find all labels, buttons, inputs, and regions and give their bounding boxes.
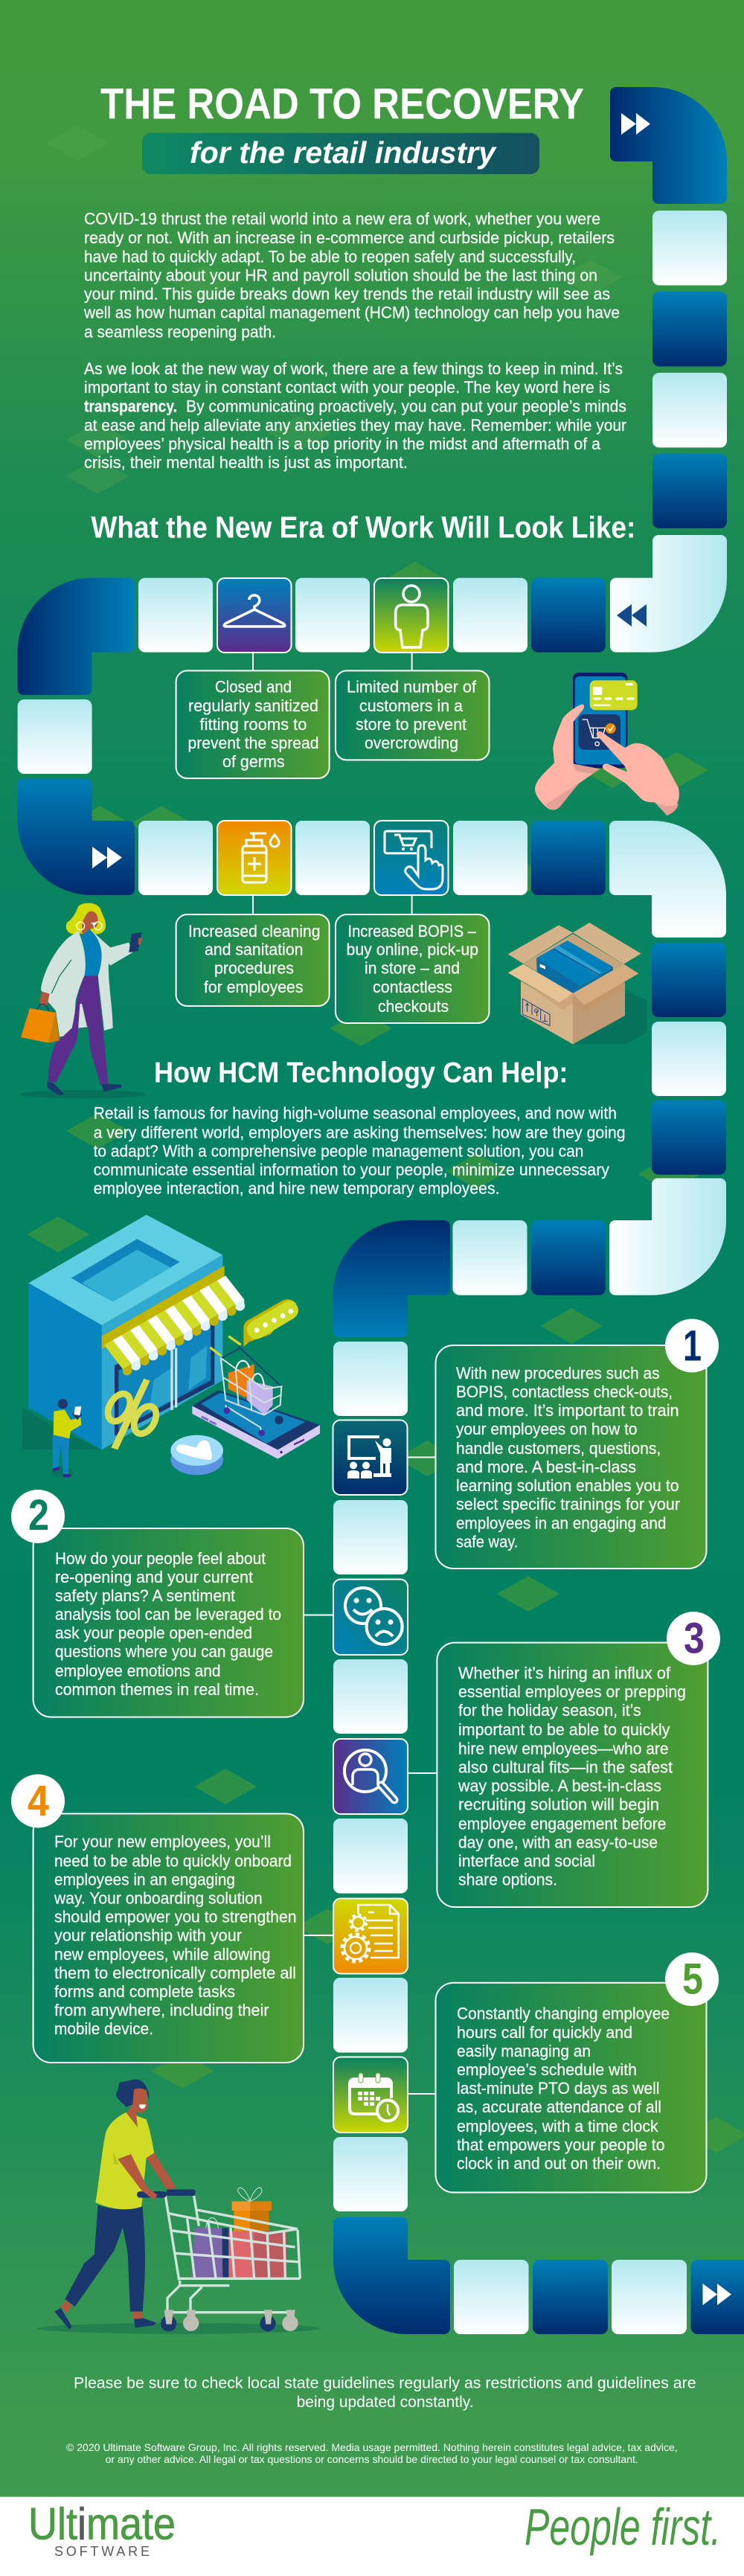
- badge 3: [667, 1612, 720, 1665]
- legal disclaimer: [66, 2441, 678, 2465]
- badge 5: [665, 1952, 719, 2006]
- callout: cleaning procedures: procedures: [214, 959, 294, 978]
- callout: fitting rooms: fitting rooms to: [199, 715, 307, 734]
- callout 3: recruiting: day one, with an easy-to-use: [458, 1833, 658, 1851]
- illustration: open cardboard box: [508, 923, 647, 1044]
- heading: how HCM can help: How HCM Technology Can Help:: [154, 1057, 568, 1089]
- callout 4: onboarding: mobile device.: [54, 2019, 153, 2038]
- callout 5: time clock: easily managing an: [457, 2042, 591, 2060]
- callout 4: onboarding: way. Your onboarding solution: [54, 1888, 263, 1908]
- intro paragraph 2: crisis, their mental health is just as important.: [84, 453, 408, 472]
- callout 3: recruiting: also cultural fits—in the safest: [458, 1758, 673, 1777]
- HCM paragraph: communicate essential information to your people, minimize unnecessary: [94, 1161, 610, 1179]
- badge 2: 2: [28, 1491, 49, 1539]
- callout 5: time clock: Constantly changing employee: [457, 2004, 670, 2022]
- logo: Ultimate Software: Ultimate: [28, 2499, 176, 2549]
- icon tile: recruiting search: [333, 1739, 408, 1814]
- icon tile: sanitizer bottle: [217, 821, 292, 895]
- callout 1: training: [408, 1319, 719, 1569]
- callout 3: recruiting: share options.: [458, 1871, 557, 1888]
- callout 5: time clock: employees, with a time clock: [457, 2117, 659, 2136]
- callout 2: sentiment analysis: common themes in real time.: [55, 1680, 259, 1699]
- callout 3: recruiting: hire new employees—who are: [458, 1740, 669, 1758]
- icon tile: hanger: [217, 578, 292, 653]
- callout 3: recruiting: for the holiday season, it’s: [458, 1701, 641, 1720]
- callout 4: onboarding: new employees, while allowing: [54, 1945, 271, 1964]
- callout: fitting rooms: [176, 653, 330, 778]
- callout: cleaning procedures: [176, 895, 330, 1006]
- badge 2: [11, 1490, 65, 1543]
- intro paragraph 1: COVID-19 thrust the retail world into a new era of work, whether you were: [84, 209, 600, 228]
- callout 2: sentiment analysis: questions where you can gauge: [55, 1642, 273, 1661]
- callout 5: time clock: that empowers your people to: [457, 2136, 665, 2154]
- icon tile: calendar and clock: [333, 2057, 408, 2133]
- legal disclaimer: or any other advice. All legal or tax questions or concerns should be directed to your legal counsel or tax consultant.: [106, 2453, 638, 2465]
- callout 2: sentiment analysis: How do your people feel about: [55, 1549, 266, 1568]
- heading: new era of work: What the New Era of Work Will Look Like:: [91, 510, 635, 545]
- background diamonds: upper, faint: [46, 125, 622, 494]
- road: left elbow top: [18, 578, 135, 695]
- callout: limited customers: customers in a: [359, 696, 464, 715]
- callout: BOPIS: checkouts: [378, 997, 449, 1016]
- footer band: [0, 2497, 744, 2576]
- badge 1: 1: [683, 1322, 702, 1371]
- intro paragraph 2: at ease and help alleviate any anxieties they may have. Remember: while your: [84, 416, 626, 435]
- callout 3: recruiting: employee engagement before: [458, 1814, 666, 1833]
- badge 4: [11, 1774, 65, 1827]
- callout 4: onboarding: [11, 1774, 333, 2063]
- road: left elbow bottom with arrow: [18, 778, 135, 895]
- icon tile: cart touch screen: [374, 821, 448, 895]
- subtitle banner: [142, 133, 539, 174]
- callout 5: time clock: hours call for quickly and: [457, 2023, 632, 2042]
- icon tile: onboarding gears and document: [333, 1899, 408, 1973]
- callout 1: training: employees in an engaging and: [456, 1513, 666, 1533]
- callout 4: onboarding: from anywhere, including their: [54, 2001, 269, 2019]
- title: THE ROAD TO RECOVERY: [100, 80, 584, 128]
- callout 3: recruiting: Whether it’s hiring an influx of: [458, 1664, 671, 1682]
- callout 5: time clock: clock in and out on their own.: [457, 2154, 661, 2173]
- intro paragraph 1: ready or not. With an increase in e-commerce and curbside pickup, retailers: [84, 228, 615, 247]
- callout 4: onboarding: your relationship with your: [54, 1926, 242, 1945]
- intro paragraph 2: transparency.: [84, 397, 177, 416]
- icon tile: training: [333, 1420, 408, 1495]
- road: third row tiles: [452, 1220, 606, 1295]
- road: second row tiles: [138, 821, 606, 895]
- callout: limited customers: store to prevent: [356, 715, 466, 734]
- callout: fitting rooms: regularly sanitized: [188, 696, 318, 715]
- road: top elbow with start arrow: [610, 87, 727, 204]
- badge 5: 5: [682, 1955, 703, 2003]
- callout 5: time clock: as, accurate attendance of all: [457, 2098, 661, 2116]
- callout 3: recruiting: way possible. A best-in-class: [458, 1777, 661, 1795]
- callout: BOPIS: Increased BOPIS –: [348, 922, 477, 941]
- illustration: man pushing shopping cart: [37, 2080, 320, 2334]
- road: right column tiles 2: [652, 943, 726, 1175]
- intro paragraph 1: a seamless reopening path.: [84, 323, 276, 342]
- callout 4: onboarding: For your new employees, you’ll: [54, 1833, 271, 1851]
- callout 1: training: learning solution enables you to: [456, 1476, 679, 1495]
- callout 4: onboarding: them to electronically complete all: [54, 1964, 296, 1982]
- callout 1: training: select specific trainings for your: [456, 1495, 680, 1513]
- icon tile: person: [374, 578, 448, 653]
- callout: BOPIS: [336, 895, 490, 1023]
- road: bottom row tiles with exit arrow: [454, 2260, 744, 2334]
- closing note: Please be sure to check local state guidelines regularly as restrictions and guidelines are: [74, 2374, 696, 2392]
- legal disclaimer: © 2020 Ultimate Software Group, Inc. All rights reserved. Media usage permitted. Nothing herein constitutes legal advice, tax advice,: [66, 2441, 678, 2453]
- callout 5: time clock: employee’s schedule with: [457, 2060, 637, 2079]
- callout 1: training: BOPIS, contactless check-outs,: [456, 1382, 673, 1401]
- callout 5: time clock: [408, 1952, 719, 2192]
- road: centre column tiles: [333, 1342, 408, 2211]
- intro paragraph 2: By communicating proactively, you can put your people’s minds: [186, 397, 626, 416]
- callout 1: training: and more. A best-in-class: [456, 1458, 636, 1476]
- callout: cleaning procedures: and sanitation: [205, 941, 304, 959]
- callout 1: training: and more. It’s important to train: [456, 1401, 679, 1420]
- icon: forward arrow: [702, 2284, 731, 2305]
- callout 2: sentiment analysis: employee emotions and: [55, 1662, 221, 1680]
- road: right elbow 3: [609, 821, 726, 938]
- callout: fitting rooms: prevent the spread: [187, 734, 318, 752]
- callout 2: sentiment analysis: ask your people open-ended: [55, 1624, 252, 1642]
- callout: BOPIS: contactless: [373, 978, 452, 996]
- callout 1: training: safe way.: [456, 1533, 518, 1551]
- intro paragraph 1: your mind. This guide breaks down key trends the retail industry will see as: [84, 285, 610, 304]
- callout 4: onboarding: forms and complete tasks: [54, 1982, 235, 2001]
- road: first row tiles: [138, 578, 606, 653]
- callout: cleaning procedures: for employees: [204, 978, 304, 996]
- illustration: hands holding phone: [535, 673, 679, 816]
- callout 2: sentiment analysis: [11, 1490, 333, 1717]
- callout 4: onboarding: should empower you to strengthen: [54, 1908, 297, 1926]
- HCM paragraph: [94, 1104, 626, 1198]
- icon tile: sentiment faces: [333, 1579, 408, 1655]
- icon: forward arrow: [621, 113, 650, 135]
- badge 1: [665, 1319, 719, 1372]
- closing note: being updated constantly.: [297, 2393, 474, 2411]
- HCM paragraph: a very different world, employers are asking themselves: how are they going: [94, 1124, 626, 1141]
- road: second elbow with back arrow: [610, 535, 727, 653]
- HCM paragraph: to adapt? With a comprehensive people management solution, you can: [94, 1141, 583, 1161]
- subtitle banner: for the retail industry: [190, 135, 497, 170]
- road: right elbow 4: [609, 1179, 726, 1295]
- callout 1: training: handle customers, questions,: [456, 1439, 661, 1458]
- intro paragraph 2: important to stay in constant contact with your people. The key word here is: [84, 378, 610, 397]
- callout: fitting rooms: Closed and: [215, 678, 292, 696]
- background diamonds: lower: [27, 562, 744, 2153]
- intro paragraph 1: uncertainty about your HR and payroll solution should be the last thing on: [84, 266, 597, 285]
- badge 4: 4: [28, 1777, 49, 1825]
- intro paragraph 1: [83, 209, 620, 342]
- callout 3: recruiting: [408, 1612, 720, 1907]
- callout: cleaning procedures: Increased cleaning: [188, 922, 320, 941]
- callout 3: recruiting: interface and social: [458, 1851, 595, 1871]
- callout 1: training: your employees on how to: [456, 1420, 637, 1438]
- icon: forward arrow: [92, 847, 122, 868]
- callout: fitting rooms: of germs: [222, 752, 285, 771]
- callout: limited customers: overcrowding: [365, 734, 458, 752]
- callout 3: recruiting: important to be able to quickly: [458, 1720, 670, 1739]
- callout 5: time clock: last-minute PTO days as well: [457, 2079, 659, 2098]
- callout: limited customers: Limited number of: [347, 678, 477, 696]
- callout 4: onboarding: employees in an engaging: [54, 1871, 235, 1888]
- HCM paragraph: employee interaction, and hire new temporary employees.: [94, 1179, 500, 1198]
- callout 3: recruiting: essential employees or prepping: [458, 1682, 686, 1701]
- intro paragraph 2: [84, 359, 626, 472]
- callout 3: recruiting: recruiting solution will begin: [458, 1795, 659, 1814]
- callout: limited customers: [336, 653, 490, 760]
- intro paragraph 1: well as how human capital management (HCM) technology can help you have: [83, 304, 620, 322]
- callout 2: sentiment analysis: safety plans? A sentiment: [55, 1586, 235, 1605]
- callout: BOPIS: in store – and: [365, 959, 460, 978]
- callout: BOPIS: buy online, pick-up: [347, 941, 478, 959]
- icon: back arrow: [617, 604, 647, 627]
- callout 2: sentiment analysis: re-opening and your current: [55, 1568, 253, 1586]
- road: bottom elbow: [333, 2217, 450, 2334]
- callout 4: onboarding: need to be able to quickly onboard: [54, 1851, 292, 1871]
- callout 2: sentiment analysis: analysis tool can be leveraged to: [55, 1605, 281, 1624]
- HCM paragraph: Retail is famous for having high-volume seasonal employees, and now with: [94, 1104, 617, 1123]
- intro paragraph 2: employees’ physical health is a top priority in the midst and aftermath of a: [84, 435, 600, 453]
- road: centre top elbow: [333, 1220, 450, 1337]
- illustration: isometric store with cart and phone: [22, 1215, 320, 1478]
- badge 3: 3: [684, 1614, 705, 1662]
- closing note: [74, 2374, 696, 2411]
- intro paragraph 2: As we look at the new way of work, there are a few things to keep in mind. It’s: [84, 359, 623, 378]
- road: right column tiles 1: [652, 211, 727, 528]
- callout 1: training: With new procedures such as: [456, 1364, 659, 1382]
- intro paragraph 1: have had to quickly adapt. To be able to reopen safely and successfully,: [84, 248, 576, 266]
- road: left connecting tile: [18, 699, 92, 774]
- logo: Ultimate Software: SOFTWARE: [54, 2544, 150, 2559]
- illustration: woman with shopping bag: [20, 903, 147, 1098]
